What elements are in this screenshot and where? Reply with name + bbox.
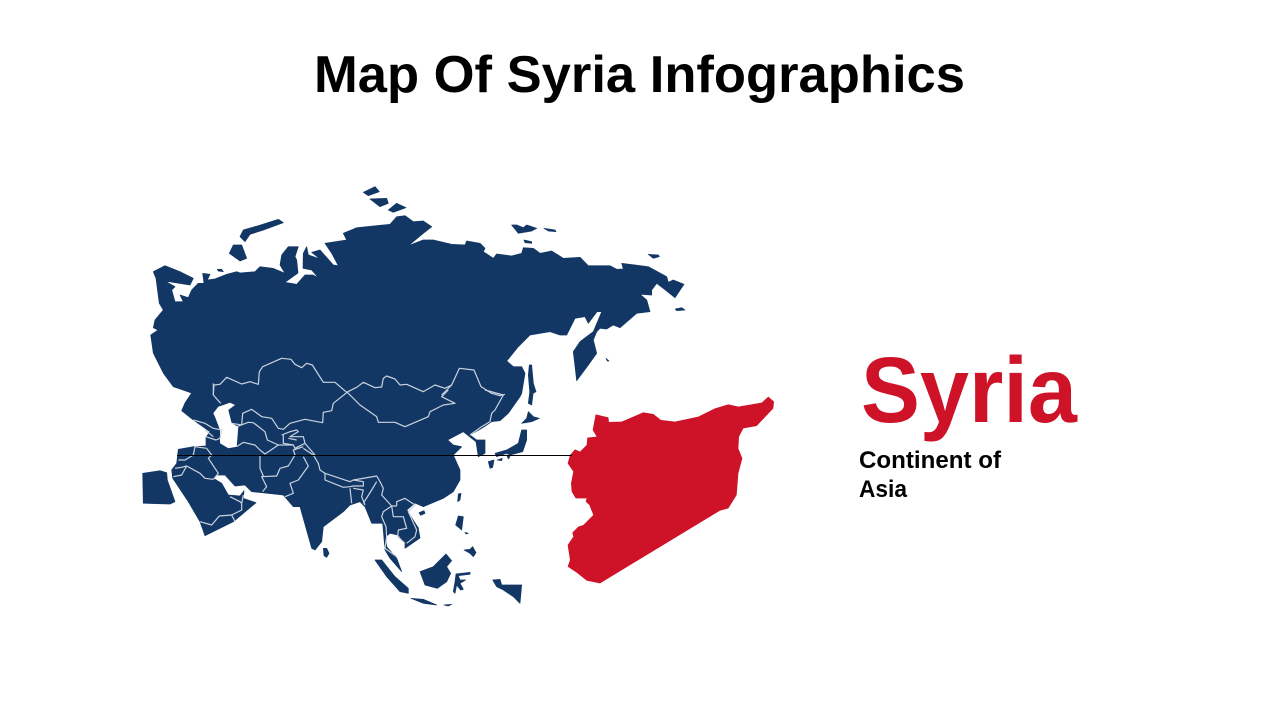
Caspian Sea bbox=[213, 403, 238, 448]
map: Asia bbox=[143, 187, 685, 606]
label: Continent of Asia: Asia bbox=[859, 476, 908, 503]
central and south Asia borders bbox=[173, 383, 417, 557]
mainland Asia bbox=[151, 216, 684, 572]
Arctic islands bbox=[217, 187, 406, 272]
title: Map Of Syria Infographics bbox=[314, 46, 965, 104]
label: Continent of Asia bbox=[859, 447, 1002, 503]
Japan and Southeast Asian islands bbox=[323, 390, 539, 606]
label: Continent of Asia: Continent of bbox=[859, 447, 1002, 474]
northern country borders bbox=[213, 358, 505, 396]
label: Syria: Syria bbox=[861, 338, 1078, 442]
Mongolia and Manchuria borders bbox=[347, 390, 503, 435]
Egypt bbox=[143, 471, 175, 504]
eastern Siberian islands bbox=[512, 225, 685, 395]
map: Syria bbox=[568, 397, 774, 583]
connector line bbox=[177, 454, 572, 456]
